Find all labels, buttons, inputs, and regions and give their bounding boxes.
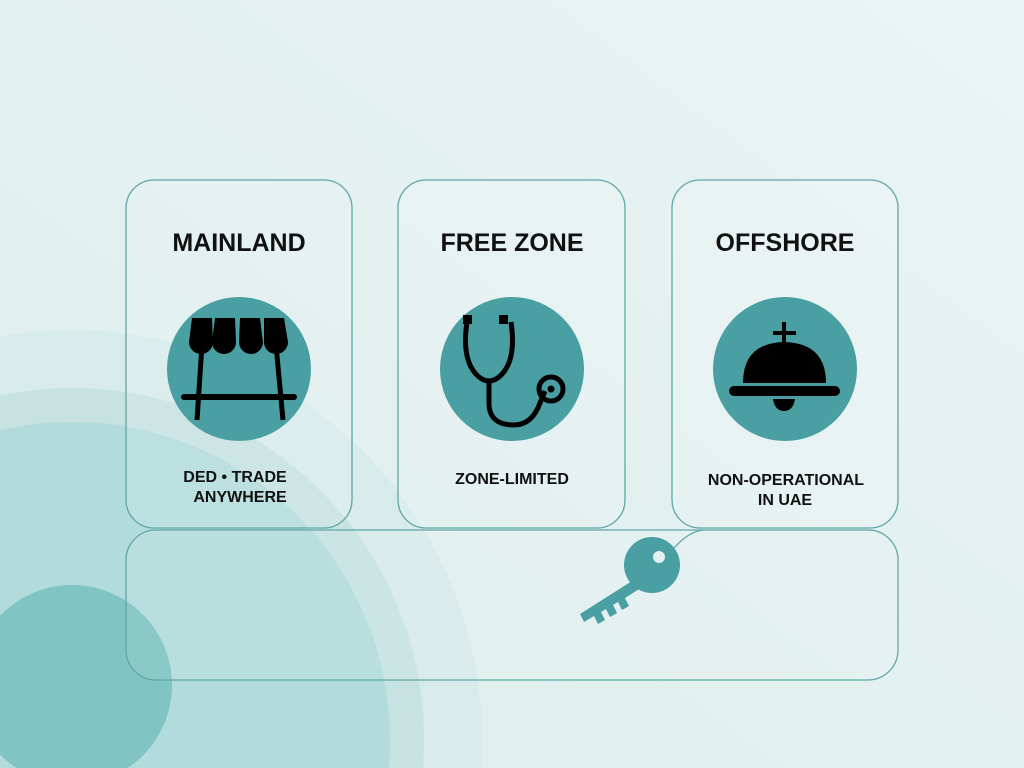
heading: free zone: FREE ZONE: [440, 229, 584, 257]
heading: offshore: OFFSHORE: [716, 229, 854, 257]
panel: offshore: IN UAE: [758, 492, 812, 509]
panel: mainland: [126, 180, 352, 528]
icon: stethoscope: [440, 297, 584, 441]
bottom panel: [126, 530, 898, 680]
icon: key: [580, 530, 704, 624]
panel: mainland: ANYWHERE: [193, 489, 287, 506]
panel: free zone: [398, 180, 625, 528]
panel: offshore: [672, 180, 898, 528]
label: free zone: ZONE-LIMITED: [455, 471, 569, 488]
label: mainland: DED • TRADE: [183, 469, 287, 486]
icon: service bell: [713, 297, 857, 441]
label: offshore: NON-OPERATIONAL: [708, 472, 864, 489]
heading: mainland: MAINLAND: [172, 229, 306, 257]
icon: market stall: [167, 297, 311, 441]
